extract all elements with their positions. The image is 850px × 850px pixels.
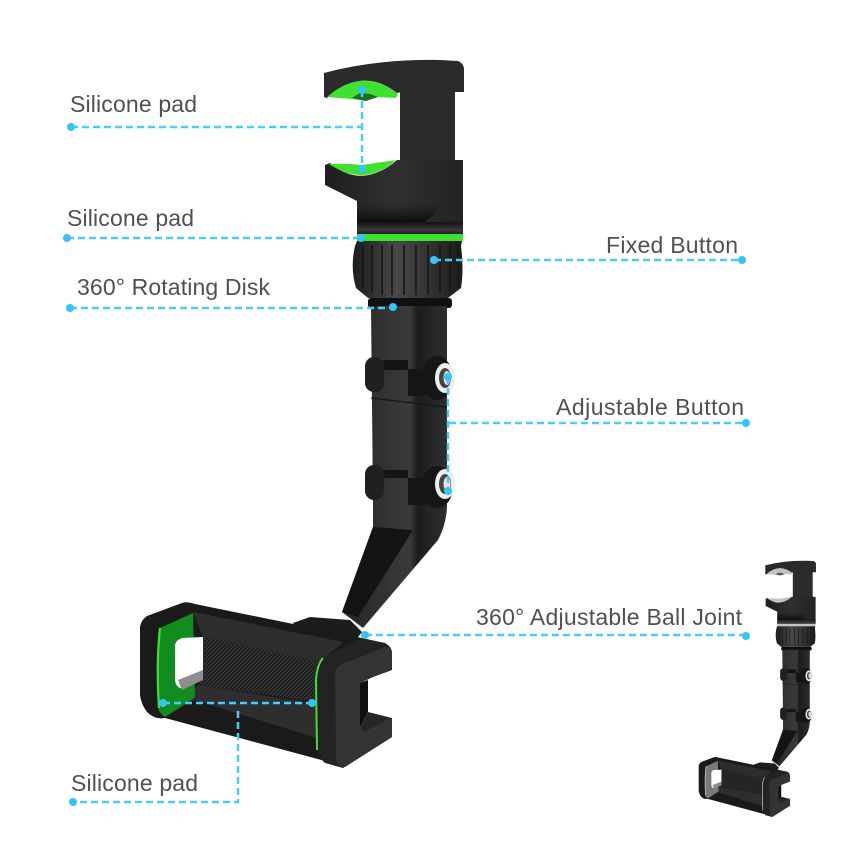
collar [357, 222, 463, 235]
callout: adjustable button: Adjustable Button [556, 394, 744, 420]
upright column [400, 90, 455, 165]
clamp right block [317, 638, 392, 768]
callout: silicone pad top [67, 86, 366, 173]
rotating knob [353, 241, 462, 308]
callout: rotating disk: 360° Rotating Disk [77, 274, 270, 300]
thumbnail product view [699, 561, 816, 817]
callout: ball joint [361, 604, 750, 640]
callout: ball joint: 360° Adjustable Ball Joint [476, 604, 743, 630]
green pad: lower jaw [329, 160, 396, 175]
callout: fixed button [430, 232, 746, 264]
left cut-out [175, 637, 203, 688]
callout: adjustable button [444, 373, 750, 495]
top jaw [324, 60, 464, 98]
callout: silicone pad ring: Silicone pad [67, 205, 194, 231]
adjustable button upper [421, 356, 455, 400]
clamp back wall [193, 612, 343, 662]
green edge: right [316, 658, 323, 750]
right block front face [335, 647, 392, 767]
product: phone holder [140, 60, 464, 768]
adjustable button lower [421, 466, 455, 508]
hinge notches [383, 360, 408, 370]
phone clamp back frame [140, 602, 362, 765]
ball joint [293, 617, 362, 645]
arm [342, 306, 447, 628]
callout: silicone pad holder [69, 699, 316, 806]
green pad: top jaw [327, 81, 398, 101]
callout: fixed button: Fixed Button [606, 232, 738, 258]
callout: silicone pad holder: Silicone pad [71, 770, 198, 796]
lower jaw and body [325, 160, 463, 234]
green pad: left [157, 613, 195, 717]
carbon fibre panel [198, 637, 320, 702]
body shadow [357, 204, 438, 222]
right block notch wall [360, 680, 368, 728]
green ring [357, 234, 463, 241]
callout: silicone pad ring [63, 205, 365, 242]
callout: silicone pad top: Silicone pad [70, 91, 197, 117]
clamp lower wall [165, 685, 317, 738]
pad serration: top [352, 93, 378, 101]
callout: rotating disk [66, 274, 397, 312]
